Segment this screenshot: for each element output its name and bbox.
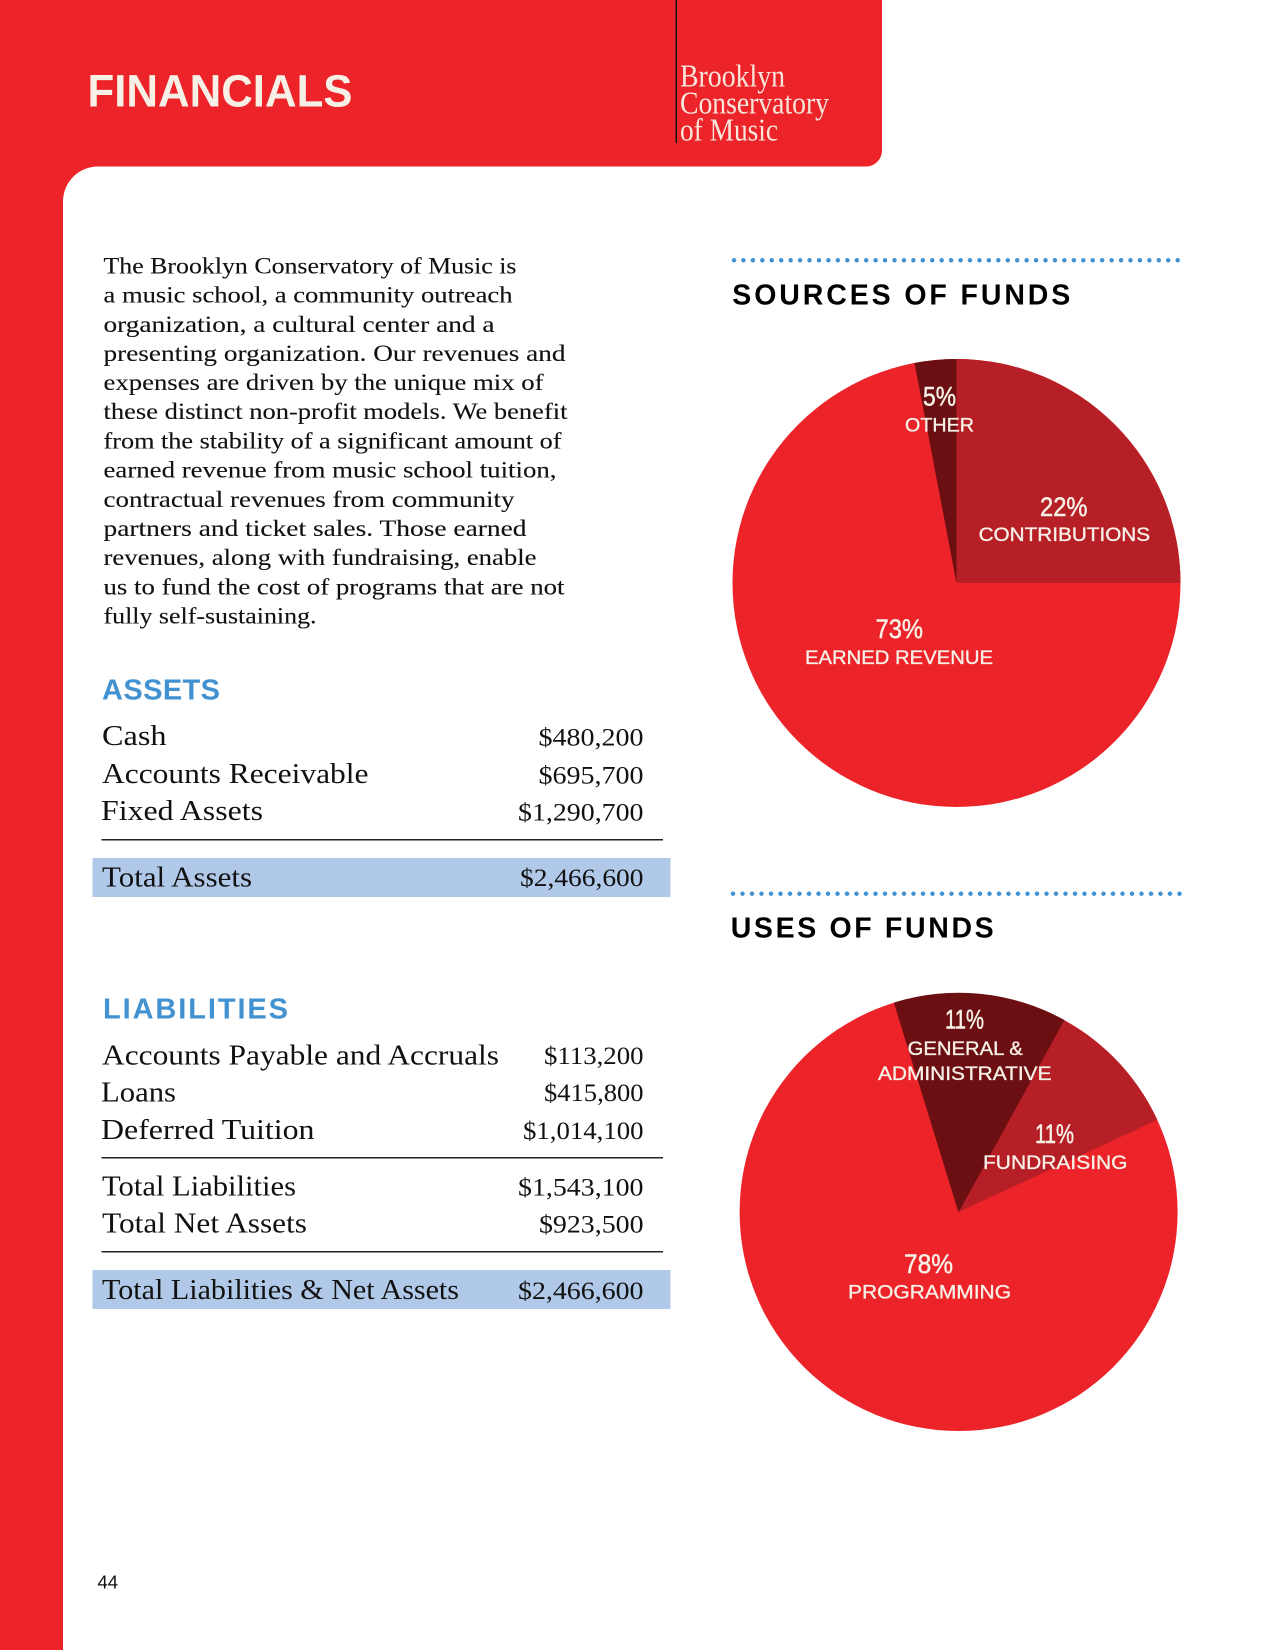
panel: uses of funds bbox=[731, 894, 1180, 1431]
row: accounts receivable: $695,700 bbox=[538, 762, 644, 789]
row: cash: $480,200 bbox=[538, 724, 644, 751]
label: other 5%: OTHER bbox=[905, 415, 974, 436]
logo: Brooklyn Conservatory of Music: of Music bbox=[680, 112, 778, 148]
label: earned revenue 73%: EARNED REVENUE bbox=[805, 648, 993, 669]
label: fundraising 11% bbox=[983, 1119, 1128, 1174]
intro paragraph: us to fund the cost of programs that are not bbox=[104, 574, 565, 600]
logo: Brooklyn Conservatory of Music bbox=[676, 0, 829, 148]
heading: sources of funds: SOURCES OF FUNDS bbox=[732, 280, 1070, 312]
heading: uses of funds: USES OF FUNDS bbox=[731, 912, 994, 944]
row: total liabilities bbox=[102, 1172, 644, 1202]
pie chart: uses of funds bbox=[740, 993, 1178, 1431]
intro paragraph bbox=[104, 253, 568, 630]
label: contributions 22% bbox=[979, 492, 1150, 546]
label: programming 78%: PROGRAMMING bbox=[848, 1283, 1011, 1304]
row: loans: $415,800 bbox=[544, 1080, 644, 1107]
row: accounts payable: Accounts Payable and Accruals bbox=[102, 1040, 499, 1072]
page number: 44 bbox=[98, 1572, 118, 1592]
label: other 5%: 5% bbox=[923, 382, 956, 412]
intro paragraph: contractual revenues from community bbox=[104, 487, 515, 513]
pie chart: sources of funds bbox=[732, 359, 1180, 807]
row: total net assets: $923,500 bbox=[539, 1211, 644, 1238]
label: general and administrative 11%: GENERAL & bbox=[908, 1039, 1023, 1060]
row: total net assets bbox=[102, 1208, 644, 1240]
panel: sources of funds bbox=[732, 260, 1180, 807]
row: loans: Loans bbox=[101, 1078, 176, 1108]
panel: assets table bbox=[92, 674, 670, 897]
label: general and administrative 11% bbox=[878, 1004, 1052, 1085]
row: cash bbox=[102, 721, 644, 752]
intro paragraph: presenting organization. Our revenues and bbox=[104, 341, 566, 367]
row: total liabilities and net assets highlight: $2,466,600 bbox=[518, 1278, 644, 1305]
row: total assets highlight: Total Assets bbox=[102, 863, 252, 894]
intro paragraph: earned revenue from music school tuition, bbox=[104, 458, 556, 484]
row: total assets highlight bbox=[92, 858, 670, 897]
row: deferred tuition bbox=[101, 1115, 644, 1146]
label: programming 78% bbox=[848, 1249, 1011, 1304]
heading: assets: ASSETS bbox=[102, 674, 220, 706]
label: fundraising 11%: 11% bbox=[1035, 1119, 1074, 1149]
intro paragraph: expenses are driven by the unique mix of bbox=[104, 370, 544, 396]
row: loans bbox=[101, 1078, 644, 1108]
intro paragraph: fully self-sustaining. bbox=[104, 604, 316, 630]
row: total liabilities: Total Liabilities bbox=[102, 1172, 296, 1202]
intro paragraph: a music school, a community outreach bbox=[104, 283, 513, 309]
label: general and administrative 11%: ADMINISTRATIVE bbox=[878, 1064, 1052, 1085]
row: total assets highlight: $2,466,600 bbox=[520, 865, 644, 892]
row: accounts payable: $113,200 bbox=[544, 1043, 644, 1070]
intro paragraph: organization, a cultural center and a bbox=[104, 312, 495, 338]
row: total net assets: Total Net Assets bbox=[102, 1208, 307, 1240]
intro paragraph: The Brooklyn Conservatory of Music is bbox=[104, 253, 516, 279]
row: accounts receivable: Accounts Receivable bbox=[102, 759, 368, 790]
label: fundraising 11%: FUNDRAISING bbox=[983, 1153, 1128, 1174]
label: programming 78%: 78% bbox=[904, 1249, 953, 1279]
label: contributions 22%: CONTRIBUTIONS bbox=[979, 525, 1150, 546]
row: total liabilities: $1,543,100 bbox=[518, 1174, 644, 1201]
logo: Brooklyn Conservatory of Music: Brooklyn bbox=[680, 58, 785, 94]
row: deferred tuition: Deferred Tuition bbox=[101, 1115, 314, 1146]
row: total liabilities and net assets highlight bbox=[92, 1270, 670, 1309]
label: earned revenue 73% bbox=[805, 614, 993, 669]
label: contributions 22%: 22% bbox=[1040, 492, 1088, 522]
intro paragraph: from the stability of a significant amount of bbox=[104, 428, 562, 454]
row: accounts payable bbox=[102, 1040, 644, 1072]
panel: liabilities table bbox=[92, 994, 670, 1309]
row: deferred tuition: $1,014,100 bbox=[523, 1118, 644, 1145]
title: FINANCIALS bbox=[88, 66, 352, 117]
intro paragraph: revenues, along with fundraising, enable bbox=[104, 545, 536, 571]
label: earned revenue 73%: 73% bbox=[876, 614, 923, 644]
row: fixed assets bbox=[101, 796, 644, 827]
row: total liabilities and net assets highlight: Total Liabilities & Net Assets bbox=[102, 1275, 459, 1306]
heading: liabilities: LIABILITIES bbox=[103, 994, 288, 1026]
intro paragraph: these distinct non-profit models. We benefit bbox=[104, 399, 568, 425]
row: accounts receivable bbox=[102, 759, 644, 790]
label: other 5% bbox=[905, 382, 974, 436]
red header band and sidebar bbox=[0, 0, 882, 1650]
logo: Brooklyn Conservatory of Music: Conservatory bbox=[680, 84, 829, 120]
intro paragraph: partners and ticket sales. Those earned bbox=[104, 516, 527, 542]
row: fixed assets: $1,290,700 bbox=[518, 799, 644, 826]
row: cash: Cash bbox=[102, 721, 166, 752]
row: fixed assets: Fixed Assets bbox=[101, 796, 263, 827]
label: general and administrative 11%: 11% bbox=[945, 1004, 984, 1034]
